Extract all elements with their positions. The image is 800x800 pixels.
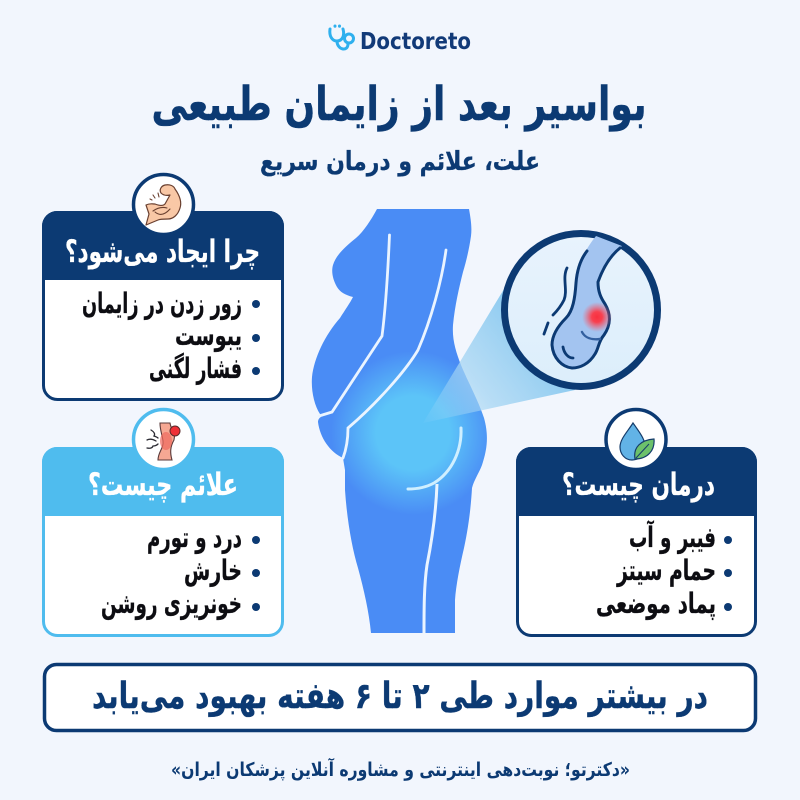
panel: symptoms: [42, 410, 284, 636]
inflamed spot: [582, 302, 612, 332]
arm line: [319, 235, 390, 416]
title: بواسیر بعد از زایمان طبیعی: [152, 77, 646, 132]
panel: causes: [42, 174, 284, 400]
heading: چرا ایجاد می‌شود؟: [65, 234, 260, 270]
panel header: [42, 447, 284, 516]
list: [596, 520, 732, 620]
callout text: در بیشتر موارد طی ۲ تا ۶ هفته بهبود می‌یابد: [92, 676, 708, 717]
pelvic glow: [312, 209, 487, 633]
list: درد و تورم: [147, 521, 242, 554]
list: فشار لگنی: [149, 352, 242, 385]
lens: [504, 234, 658, 386]
subtitle: علت، علائم و درمان سریع: [260, 147, 540, 177]
panel body: [518, 448, 756, 636]
thigh line: [424, 484, 437, 633]
list: [82, 287, 260, 385]
list: یبوست: [175, 319, 242, 352]
panel body: [44, 448, 282, 636]
list: زور زدن در زایمان: [82, 287, 242, 320]
icon: water drop and leaf: [606, 410, 666, 470]
list: فیبر و آب: [629, 520, 716, 554]
wordmark: Doctoreto: [360, 29, 471, 55]
list: حمام سیتز: [616, 554, 716, 587]
list: خارش: [184, 554, 242, 587]
zoom circle: hemorrhoid detail: [504, 234, 658, 386]
magnifier cone: [423, 289, 575, 423]
torso line: [343, 250, 446, 458]
list: پماد موضعی: [596, 587, 716, 620]
panel: treatment: [516, 410, 757, 636]
panel header: [42, 211, 284, 280]
buttock line: [408, 428, 461, 489]
panel body: [44, 212, 282, 400]
callout box: [44, 664, 756, 730]
icon: inflamed area: [134, 410, 194, 470]
heading: درمان چیست؟: [562, 467, 715, 503]
icon: flexed arm: [134, 174, 194, 234]
logo: Doctoreto: [330, 26, 471, 55]
body shape: [312, 209, 487, 633]
icon: stethoscope: [330, 26, 354, 49]
list: [101, 521, 260, 620]
callout: recovery time: [44, 664, 756, 730]
rectum: [544, 236, 622, 368]
list: خونریزی روشن: [101, 587, 242, 620]
heading: علائم چیست؟: [88, 467, 238, 503]
panel header: [516, 447, 757, 516]
footer tagline: «دکترتو؛ نوبت‌دهی اینترنتی و مشاوره آنلاین پزشکان ایران»: [171, 757, 630, 781]
body silhouette: [312, 209, 487, 633]
